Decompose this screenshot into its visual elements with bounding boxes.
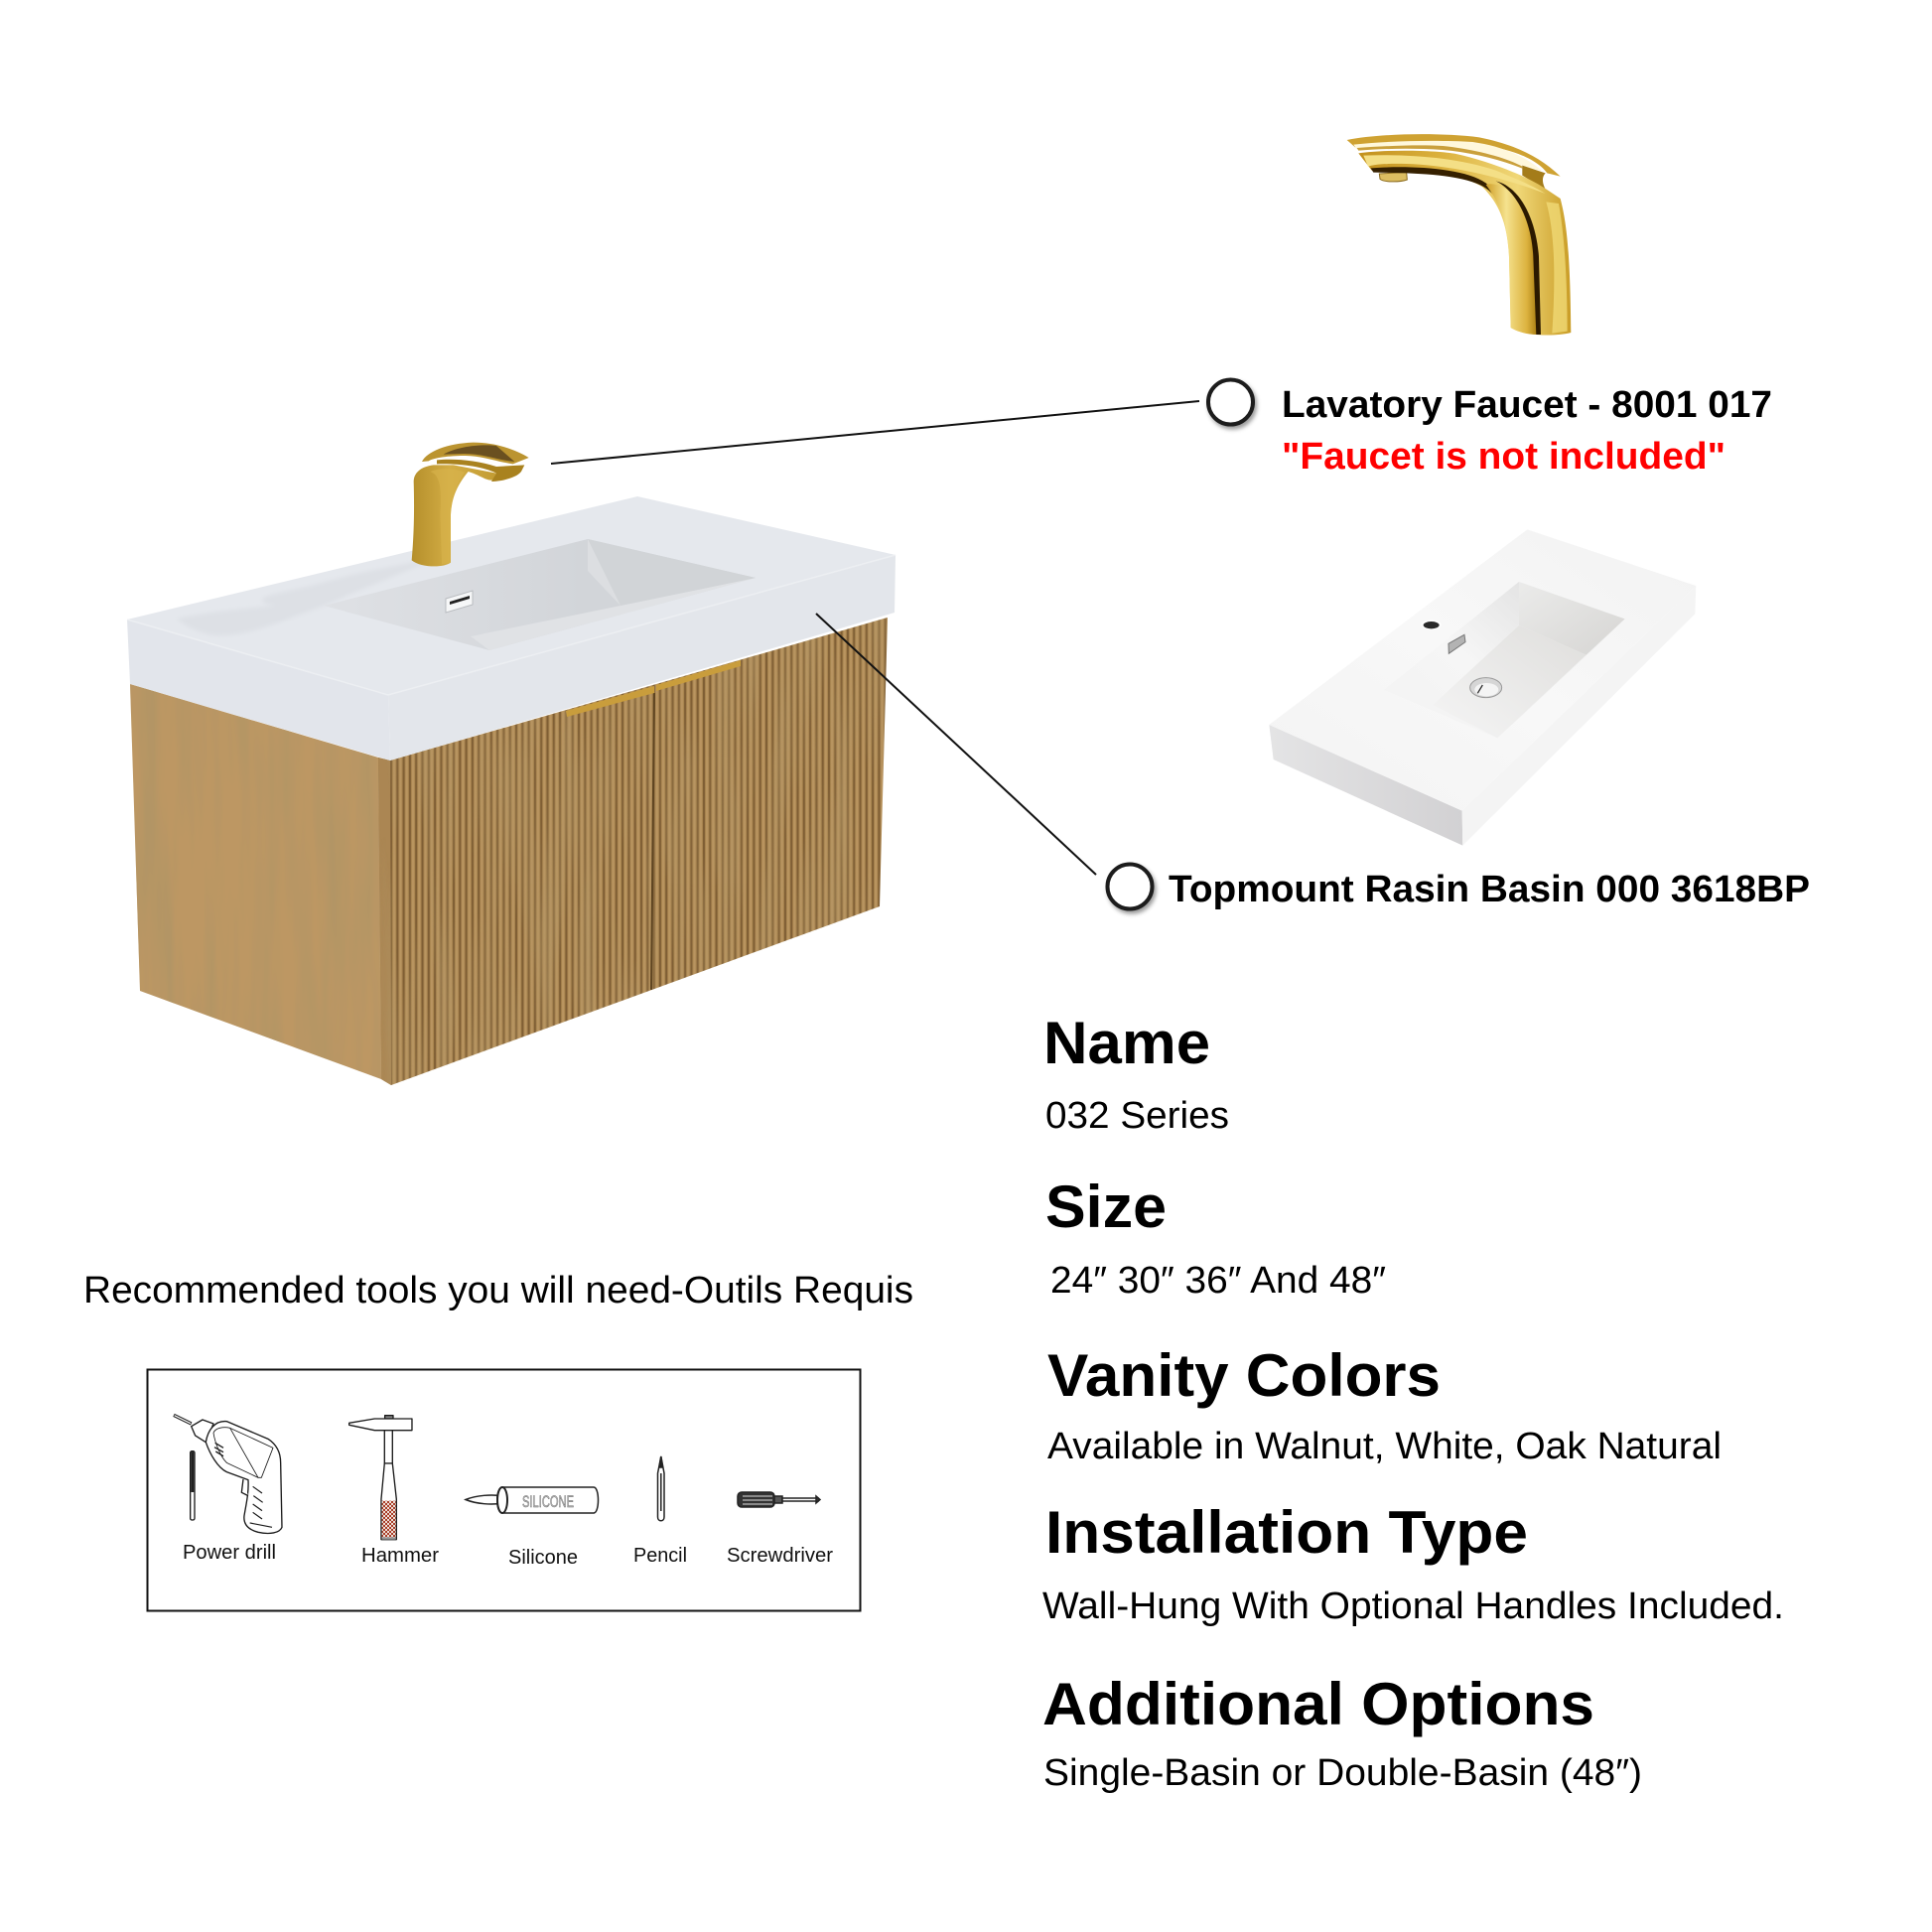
infographic canvas (86, 134, 1809, 1793)
spec: name: 032 Series (1045, 1095, 1229, 1137)
overflow slot (446, 591, 473, 613)
cabinet side panel (124, 675, 387, 1092)
recommended tools heading: Recommended tools you will need-Outils Requis (83, 1270, 913, 1311)
callout label: Lavatory Faucet - 8001 017 (1282, 384, 1772, 426)
spec: vanity colors: Vanity Colors (1047, 1342, 1441, 1409)
spec: size: Size (1045, 1173, 1167, 1240)
aerator (1379, 172, 1407, 182)
tools panel (147, 1370, 860, 1610)
spec: installation type (1042, 1499, 1784, 1627)
spec: name (1043, 1010, 1229, 1137)
cabinet ribbed front doors (377, 616, 894, 1092)
callout ring (1208, 379, 1253, 425)
icon: power drill (174, 1415, 282, 1533)
icon: silicone tube: SILICONE (522, 1492, 574, 1511)
installed matte gold faucet (412, 443, 529, 566)
product image: topmount basin detail (1269, 529, 1696, 846)
sink bowl (324, 539, 756, 650)
callout ring (1108, 864, 1152, 909)
overflow (1449, 634, 1465, 653)
callout label: Topmount Rasin Basin 000 3618BP (1169, 869, 1810, 910)
tool labels: Power drill (183, 1542, 276, 1564)
callout: topmount basin (1108, 864, 1810, 910)
drain (1470, 678, 1502, 698)
spec: additional options: Additional Options (1042, 1671, 1594, 1737)
spec: installation type: Wall-Hung With Optional Handles Included. (1042, 1586, 1784, 1627)
faucet lever (1347, 134, 1561, 177)
tool labels: Screwdriver (727, 1545, 833, 1567)
tool labels: Pencil (633, 1545, 687, 1567)
spec: vanity colors: Available in Walnut, White, Oak Natural (1047, 1426, 1722, 1467)
warning note: "Faucet is not included" (1282, 436, 1725, 478)
spec: vanity colors (1047, 1342, 1722, 1467)
tool labels (183, 1542, 833, 1569)
icon: pencil (657, 1456, 664, 1521)
spec: additional options (1042, 1671, 1642, 1794)
product image: vanity with basin and faucet (124, 443, 896, 1092)
spec: size: 24″ 30″ 36″ And 48″ (1050, 1260, 1386, 1302)
spec: size (1045, 1173, 1386, 1302)
specifications list (1042, 1010, 1784, 1794)
gold door handles (566, 660, 741, 717)
faucet hole (1422, 620, 1442, 629)
spec: additional options: Single-Basin or Double-Basin (48″) (1043, 1752, 1642, 1794)
basin bowl (1384, 582, 1625, 738)
white basin top (127, 496, 896, 760)
faucet neck (1522, 166, 1546, 191)
spec: installation type: Installation Type (1045, 1499, 1528, 1566)
spec: name: Name (1043, 1010, 1210, 1076)
icon: hammer (349, 1416, 412, 1540)
icon: silicone tube (466, 1487, 598, 1513)
tool labels: Hammer (361, 1545, 439, 1567)
leader line: basin callout (816, 614, 1096, 875)
leader line: faucet callout (551, 401, 1199, 464)
tool labels: Silicone (508, 1547, 578, 1569)
panel frame (147, 1370, 860, 1610)
faucet body (1358, 151, 1571, 336)
icon: screwdriver (738, 1492, 820, 1507)
product image: gold faucet detail (1347, 134, 1571, 336)
callout: lavatory faucet (1208, 379, 1772, 478)
